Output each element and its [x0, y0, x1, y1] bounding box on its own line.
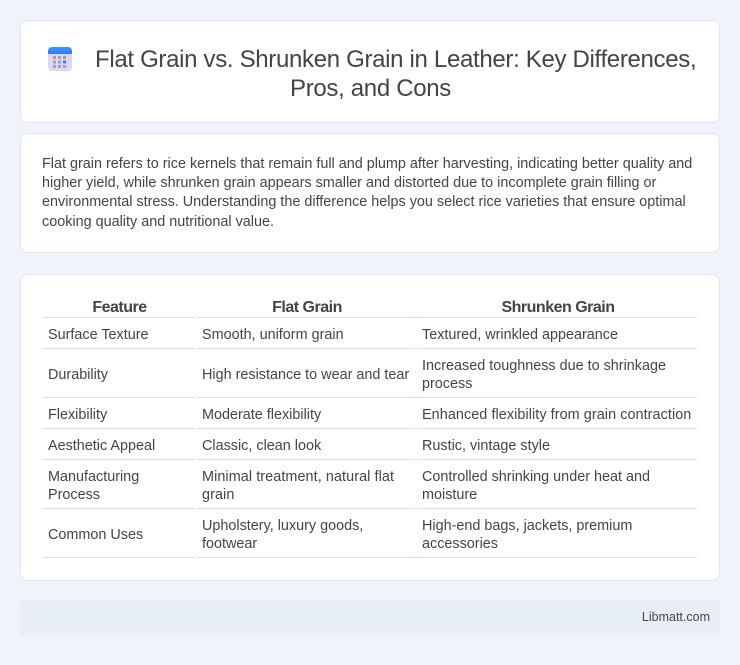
panel: title header	[20, 20, 720, 123]
table header: Feature: Feature	[92, 299, 147, 316]
row: Durability: Increased toughness due to shrinkage	[422, 358, 666, 374]
row: Common Uses: Common Uses	[48, 527, 143, 543]
row: Aesthetic Appeal: Aesthetic Appeal	[48, 438, 155, 454]
title: Flat Grain vs. Shrunken Grain in Leather: Key Differences,	[95, 46, 696, 73]
footer bar	[20, 601, 720, 635]
row: Manufacturing Process: Manufacturing	[48, 469, 139, 485]
row: Flexibility: Flexibility	[48, 407, 107, 423]
row: Surface Texture: Smooth, uniform grain	[202, 327, 344, 343]
row: Durability	[48, 358, 666, 392]
row: Common Uses: accessories	[422, 536, 498, 552]
intro paragraph: environmental stress. Understanding the difference helps you select rice varieties that ensure optimal	[42, 194, 686, 210]
row: Flexibility: Moderate flexibility	[202, 407, 321, 423]
row: Common Uses: Upholstery, luxury goods,	[202, 518, 363, 534]
title	[95, 46, 696, 102]
row: Flexibility: Enhanced flexibility from grain contraction	[422, 407, 691, 423]
row: Durability: High resistance to wear and tear	[202, 367, 409, 383]
row: Common Uses	[48, 518, 632, 552]
icon: calendar	[48, 47, 72, 71]
row: Manufacturing Process: Process	[48, 487, 100, 503]
row: Manufacturing Process: moisture	[422, 487, 477, 503]
row: Surface Texture	[48, 327, 618, 343]
row: Durability: process	[422, 376, 472, 392]
row: Durability: Durability	[48, 367, 108, 383]
row: Aesthetic Appeal: Rustic, vintage style	[422, 438, 550, 454]
row: Manufacturing Process: grain	[202, 487, 234, 503]
table header: Flat Grain: Flat Grain	[272, 299, 342, 316]
row: Surface Texture: Surface Texture	[48, 327, 149, 343]
title: Pros, and Cons	[290, 75, 451, 102]
row: Aesthetic Appeal: Classic, clean look	[202, 438, 321, 454]
intro paragraph: higher yield, while shrunken grain appears smaller and distorted due to incomplete grain filling or	[42, 175, 656, 191]
table header: Shrunken Grain: Shrunken Grain	[501, 299, 615, 316]
row: Flexibility	[48, 407, 691, 423]
row: Aesthetic Appeal	[48, 438, 550, 454]
panel: intro text	[20, 133, 720, 253]
intro paragraph: Flat grain refers to rice kernels that remain full and plump after harvesting, indicating better quality and	[42, 156, 692, 172]
row: Common Uses: footwear	[202, 536, 257, 552]
row: Manufacturing Process: Minimal treatment, natural flat	[202, 469, 394, 485]
row: Manufacturing Process	[48, 469, 650, 503]
row: Surface Texture: Textured, wrinkled appearance	[422, 327, 618, 343]
intro paragraph	[42, 156, 692, 230]
row: Common Uses: High-end bags, jackets, premium	[422, 518, 632, 534]
intro paragraph: cooking quality and nutritional value.	[42, 214, 274, 230]
row: Manufacturing Process: Controlled shrinking under heat and	[422, 469, 650, 485]
panel: comparison table	[20, 274, 720, 581]
footer credit: Libmatt.com	[642, 610, 710, 624]
